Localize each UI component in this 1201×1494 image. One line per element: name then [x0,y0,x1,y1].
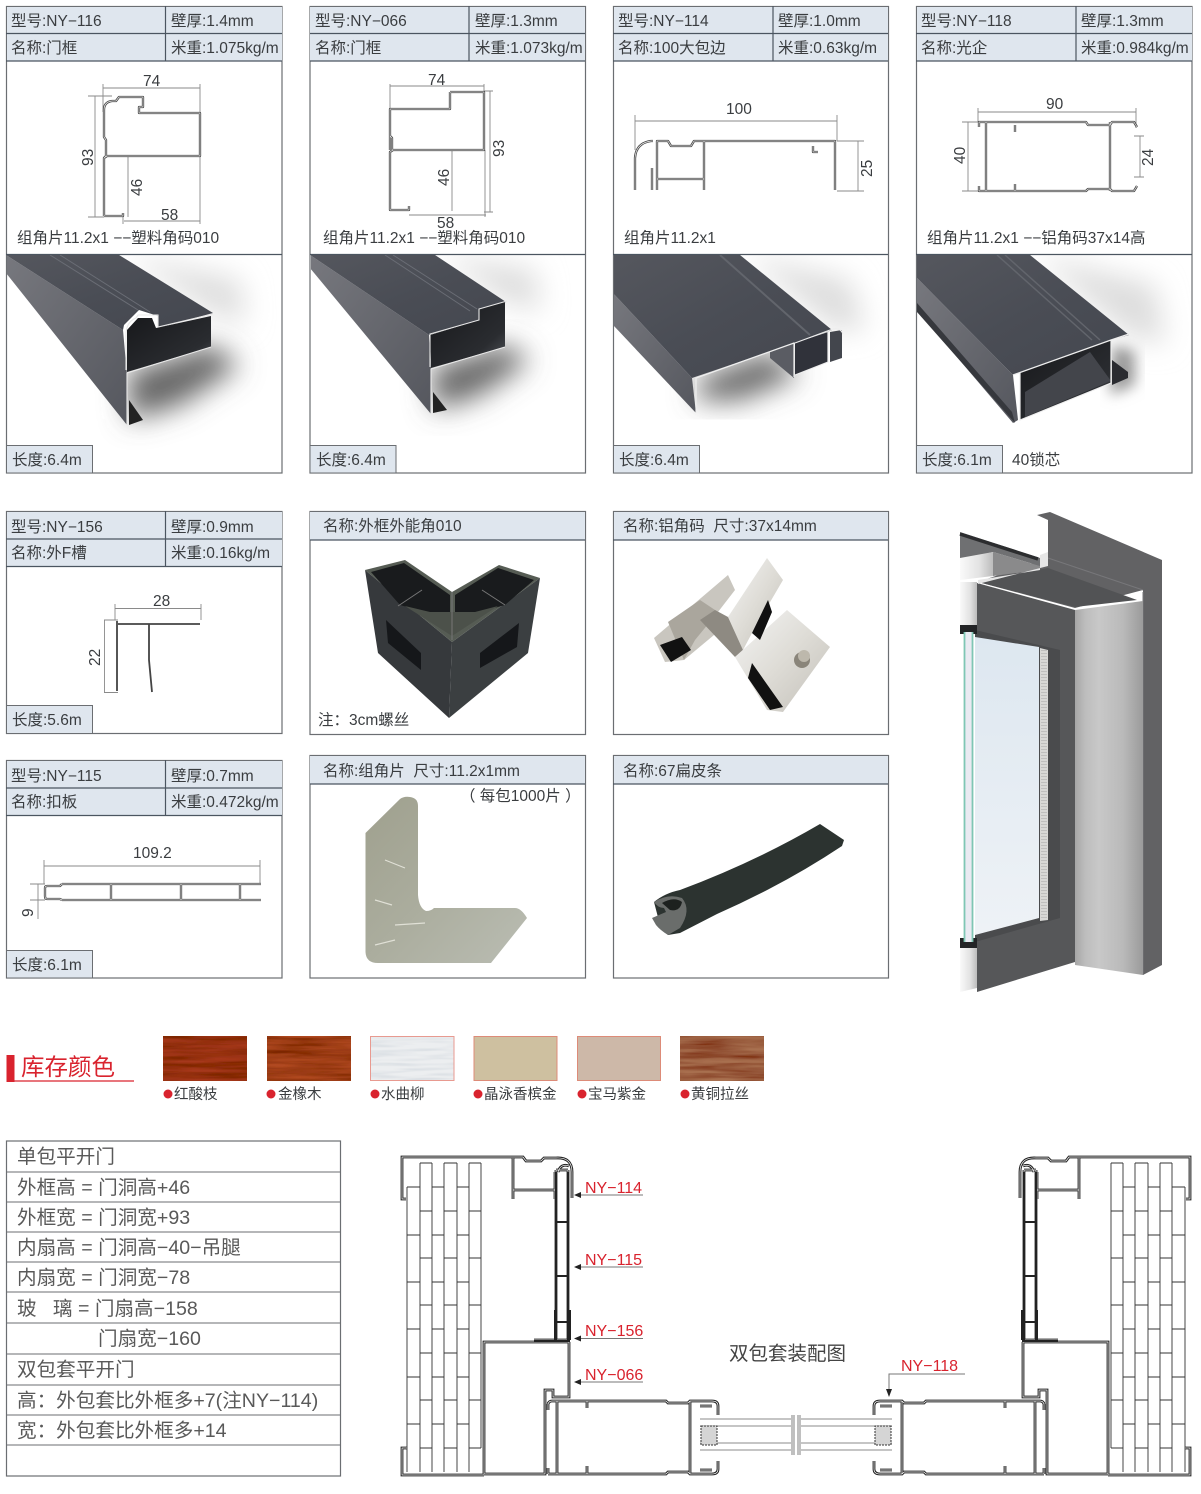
length tag: 长度:6.4m [619,451,689,469]
profile drawing: 58 [161,207,178,224]
product render [613,255,865,413]
right section [798,1157,1190,1475]
swatch: 红酸枝: 红酸枝 [174,1086,218,1103]
swatch: 宝马紫金: 宝马紫金 [588,1086,646,1103]
table: size formulas: 玻 璃 = 门扇高−158 [17,1298,198,1320]
lock core note: 40锁芯 [1012,451,1060,469]
spec header: 壁厚:0.9mm [171,518,254,536]
profile drawing [80,73,200,224]
profile drawing: 22 [87,649,104,666]
swatch: 金橡木 [266,1036,351,1103]
profile drawing: 28 [153,593,170,610]
length tag: 长度:6.1m [12,956,82,974]
panel: NY-066 door frame [310,6,586,473]
profile drawing: 100 [726,101,752,118]
panel: NY-118 light frame [916,6,1192,473]
accessory note: 组角片11.2x1 −−塑料角码010 [323,229,526,247]
table: size formulas: 单包平开门 [17,1146,115,1168]
photo: door frame cutaway [960,512,1162,992]
swatch: 黄铜拉丝: 黄铜拉丝 [691,1086,749,1103]
swatch: 水曲柳: 水曲柳 [381,1086,424,1103]
profile drawing: 24 [1140,148,1157,166]
spec header [916,6,1192,61]
profile drawing: 109.2 [133,845,172,862]
length tag: 长度:5.6m [12,711,82,729]
table: size formulas: 高：外包套比外框多+7(注NY−114) [17,1390,318,1412]
spec header [310,6,585,61]
callout: NY-118 [886,1358,965,1397]
spec header: 名称:光企 [921,39,988,57]
profile drawing [635,101,876,191]
profile drawing: 46 [129,179,146,196]
callout: NY-115: NY−115 [585,1252,642,1269]
spec header: 壁厚:1.0mm [778,12,861,30]
length tag [6,950,92,978]
profile drawing [87,593,201,692]
table: size formulas: 门扇宽−160 [98,1328,201,1350]
product render [6,255,245,425]
profile drawing: 74 [428,72,446,89]
callout: NY-114: NY−114 [585,1180,642,1197]
spec header: 米重:1.073kg/m [475,39,583,57]
colour swatches [163,1036,764,1103]
spec header: 米重:1.075kg/m [171,39,279,57]
length tag [310,446,396,473]
table: size formulas: 宽：外包套比外框多+14 [17,1420,227,1442]
length tag: 长度:6.1m [922,451,992,469]
table: size formulas [6,1141,341,1476]
accessory note: 组角片11.2x1 −−塑料角码010 [17,229,220,247]
photo: bracket [654,558,830,712]
heading: stock colours: 库存颜色 [21,1054,115,1080]
spec header: 壁厚:1.4mm [171,12,254,30]
photo: metal plate [366,797,527,963]
profile drawing: 25 [859,160,876,177]
header [613,512,888,540]
length tag [614,446,700,473]
table: size formulas: 外框宽 = 门洞宽+93 [17,1207,190,1229]
panel: corner plate [310,756,586,978]
table: size formulas: 双包套平开门 [17,1359,135,1381]
swatch: 黄铜拉丝 [680,1036,764,1103]
spec header: 壁厚:1.3mm [1081,12,1164,30]
accessory note: 组角片11.2x1 [624,229,716,247]
spec header: 名称:扣板 [11,793,77,811]
swatch: 金橡木: 金橡木 [278,1086,322,1103]
profile drawing: 93 [80,149,97,166]
spec header: 型号:NY−156 [11,518,103,536]
spec header: 型号:NY−114 [618,12,709,30]
profile drawing [390,72,508,232]
table: size formulas: 内扇宽 = 门洞宽−78 [17,1267,190,1289]
spec header: 米重:0.16kg/m [171,544,270,562]
spec header: 米重:0.472kg/m [171,793,279,811]
profile drawing [20,845,261,919]
header: 名称:组角片 尺寸:11.2x1mm [323,762,520,780]
note: 注：3cm螺丝 [318,711,409,729]
profile drawing [952,96,1157,191]
panel: NY-156 F channel [6,511,282,734]
length tag [916,446,1002,473]
spec header: 名称:门框 [315,39,381,57]
spec header: 型号:NY−066 [315,12,407,30]
callout: NY-118: NY−118 [901,1358,958,1375]
panel: outer corner 010 [310,512,586,734]
length tag: 长度:6.4m [316,451,386,469]
header [310,756,585,784]
diagram title: 双包套装配图 [729,1343,846,1365]
panel: rubber gasket [613,756,888,978]
header: 名称:67扁皮条 [623,762,722,780]
header [310,512,585,540]
header: 名称:铝角码 尺寸:37x14mm [623,517,817,535]
spec header [6,511,282,566]
swatch: 红酸枝 [163,1036,247,1103]
spec header: 壁厚:1.3mm [475,12,558,30]
product render [917,255,1165,423]
profile drawing: 40 [952,146,969,164]
table: size formulas: 内扇高 = 门洞高−40−吊腿 [17,1237,241,1259]
header: 名称:外框外能角010 [323,517,462,535]
panel: NY-115 snap plate [6,760,282,978]
spec header: 名称:门框 [11,39,77,57]
profile drawing: 9 [20,908,37,917]
spec header [6,6,282,61]
header [613,756,888,784]
spec header: 米重:0.63kg/m [778,39,877,57]
profile drawing: 90 [1046,96,1064,113]
panel: aluminium corner bracket [613,512,888,734]
swatch: 晶泳香槟金: 晶泳香槟金 [484,1086,557,1103]
spec header: 名称:外F槽 [11,544,87,562]
spec header: 型号:NY−116 [11,12,102,30]
spec header: 名称:100大包边 [618,39,726,57]
heading: stock colours [6,1054,134,1082]
profile drawing: 46 [436,169,453,186]
spec header: 壁厚:0.7mm [171,767,254,785]
spec header [613,6,888,61]
panel: NY-116 door frame [6,6,282,473]
spec header: 型号:NY−118 [921,12,1012,30]
left section [402,1157,794,1475]
table: size formulas: 外框高 = 门洞高+46 [17,1177,190,1199]
spec header [6,760,282,816]
length tag [6,446,92,473]
callout: NY-066: NY−066 [585,1367,643,1384]
profile drawing: 58 [437,215,454,232]
product render [310,255,540,414]
panel: NY-114 cover [613,6,888,473]
length tag: 长度:6.4m [12,451,82,469]
profile drawing: 74 [143,73,161,90]
spec header: 型号:NY−115 [11,767,102,785]
spec header: 米重:0.984kg/m [1081,39,1189,57]
diagram: double-cover assembly [402,1157,1190,1475]
swatch: 水曲柳 [370,1036,454,1103]
swatch: 宝马紫金 [578,1036,660,1103]
length tag [6,706,92,734]
profile drawing: 93 [491,140,508,157]
package note: （ 每包1000片 ） [460,787,581,805]
callout: NY-156: NY−156 [585,1323,643,1340]
photo: plastic corner [365,560,540,718]
photo: gasket [652,824,844,935]
swatch: 晶泳香槟金 [474,1036,557,1103]
accessory note: 组角片11.2x1 −−铝角码37x14高 [927,229,1146,247]
